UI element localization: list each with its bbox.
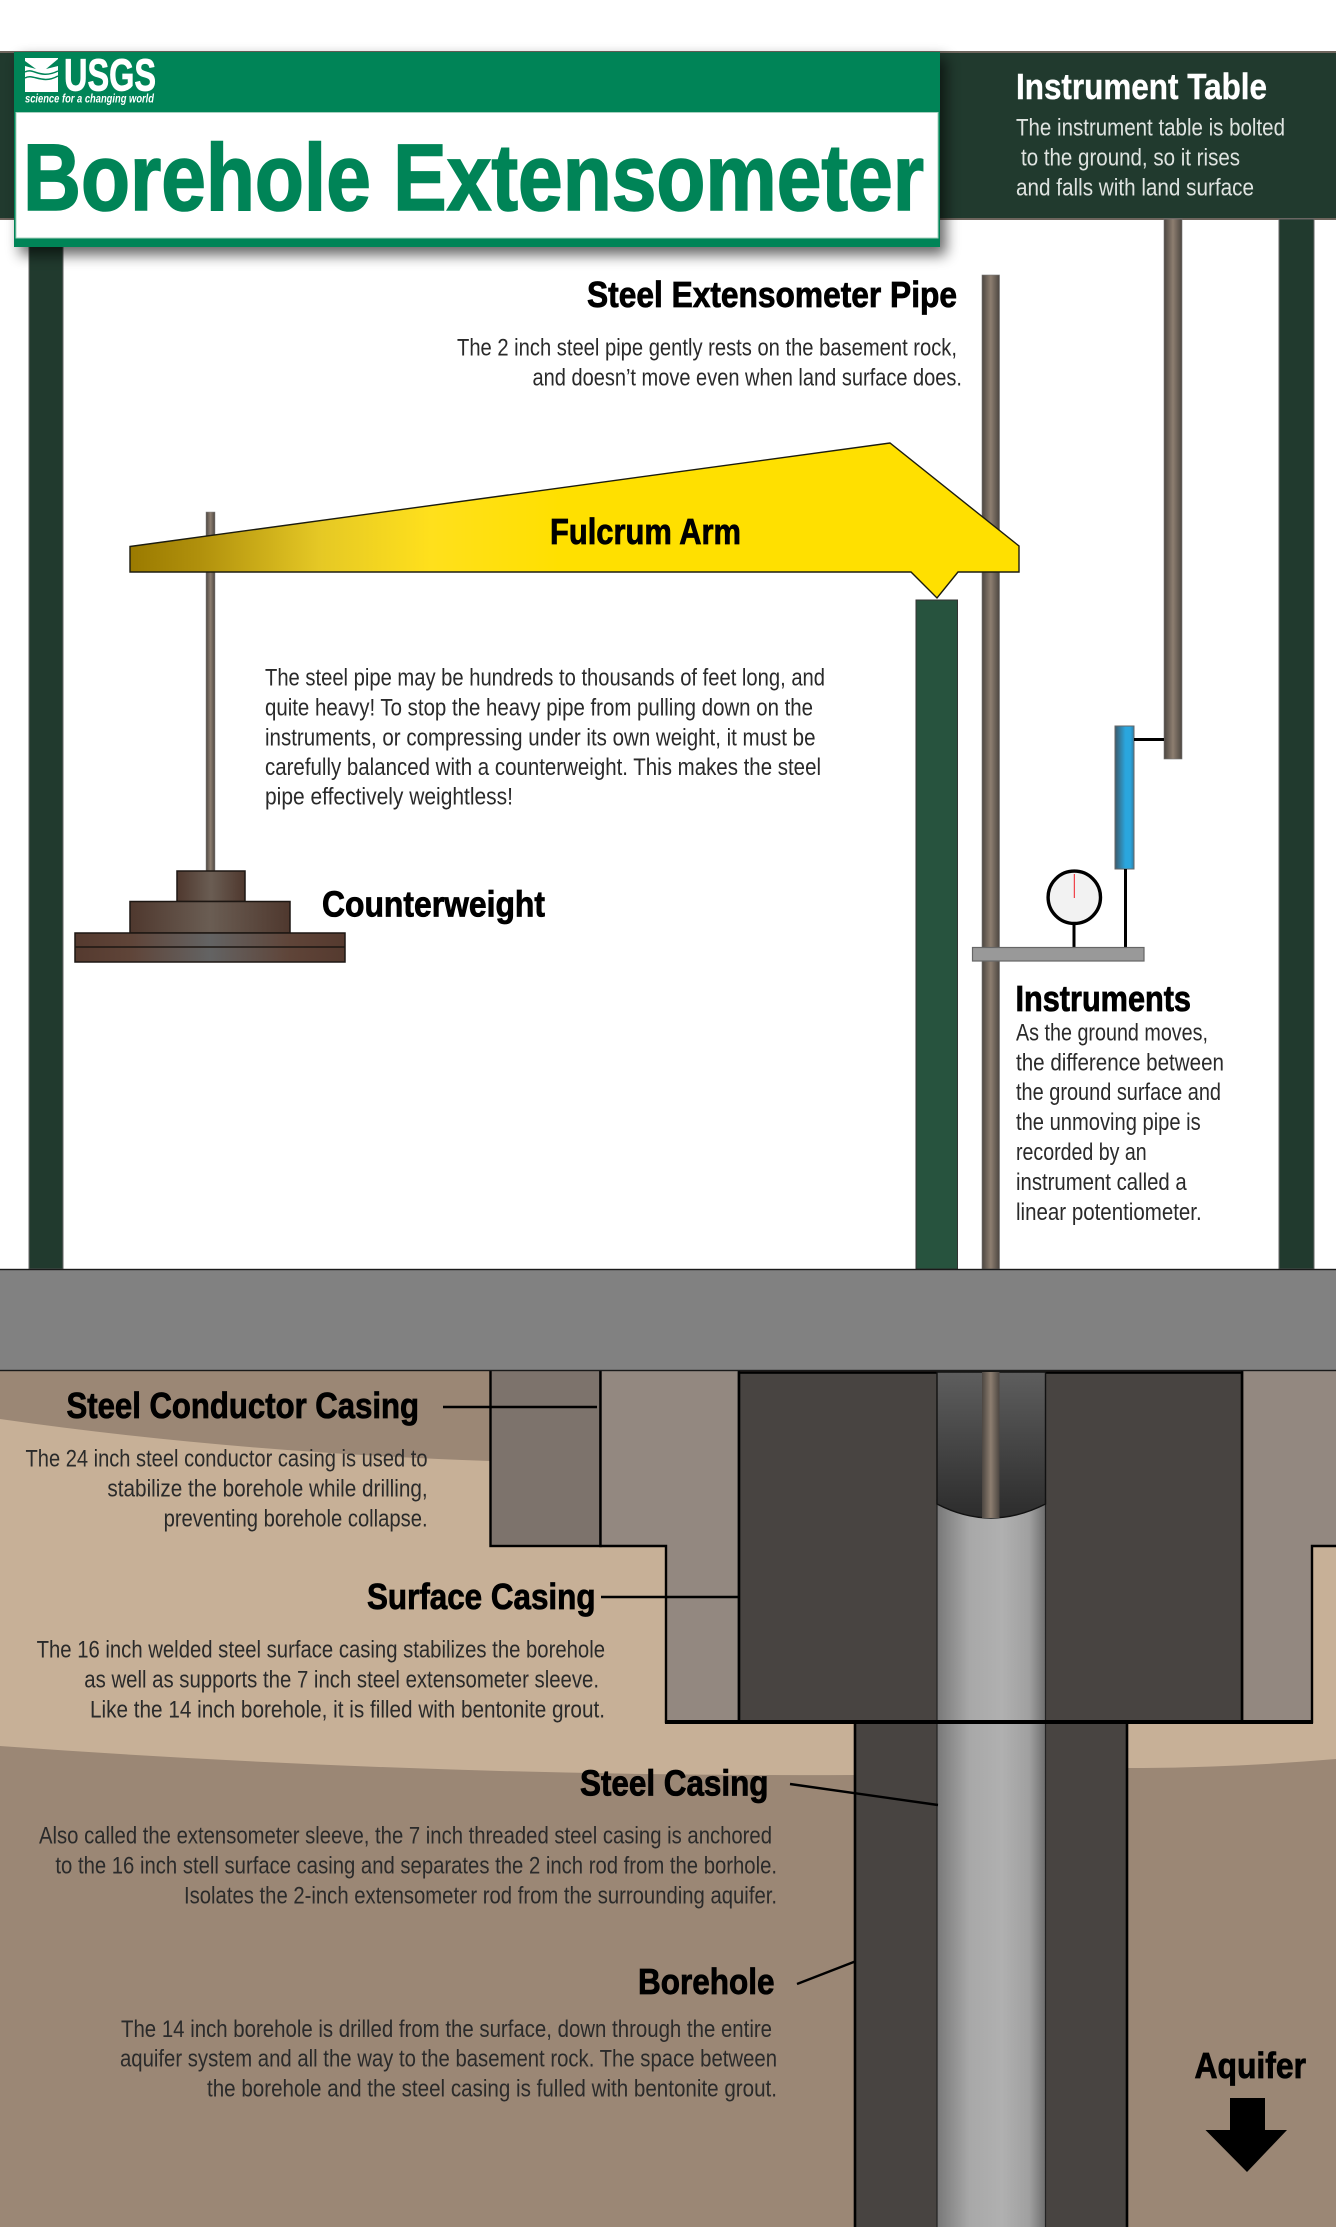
instruments description: the difference between	[1016, 1049, 1224, 1076]
instruments description: the ground surface and	[1016, 1079, 1221, 1106]
leader line: borehole	[797, 1962, 855, 1984]
steel extensometer pipe	[982, 275, 1000, 1269]
steel casing heading: Steel Casing	[580, 1762, 768, 1804]
instrument table description: to the ground, so it rises	[1021, 144, 1240, 172]
surface casing description: Like the 14 inch borehole, it is filled with bentonite grout.	[90, 1696, 605, 1723]
counterweight explanation	[265, 664, 825, 811]
surface casing description	[37, 1636, 605, 1723]
potentiometer bracket	[1134, 738, 1164, 741]
aquifer label: Aquifer	[1194, 2045, 1306, 2086]
steel casing description	[39, 1822, 777, 1909]
steel conductor casing description: The 24 inch steel conductor casing is used to	[26, 1446, 428, 1473]
USGS tagline: science for a changing world	[25, 92, 155, 106]
steel casing pipe	[937, 1500, 1046, 2227]
surface casing, right	[1242, 1369, 1336, 1722]
instruments description: recorded by an	[1016, 1139, 1147, 1166]
steel extensometer pipe heading: Steel Extensometer Pipe	[587, 274, 957, 315]
steel extensometer pipe description	[457, 334, 962, 391]
counterweight stack	[75, 871, 345, 962]
borehole with bentonite grout	[855, 1722, 1127, 2227]
concrete ground surface	[0, 1270, 1336, 1370]
counterweight explanation: pipe effectively weightless!	[265, 784, 513, 811]
borehole description: aquifer system and all the way to the basement rock. The space between	[120, 2046, 777, 2073]
steel casing description: Also called the extensometer sleeve, the 7 inch threaded steel casing is anchored	[39, 1822, 772, 1850]
counterweight label: Counterweight	[322, 884, 545, 924]
USGS logo	[25, 50, 156, 106]
borehole description: The 14 inch borehole is drilled from the surface, down through the entire	[121, 2016, 772, 2043]
counterweight rod	[206, 512, 215, 871]
leader line: steel conductor casing	[443, 1406, 597, 1408]
instruments description: the unmoving pipe is	[1016, 1109, 1201, 1136]
steel conductor casing description: stabilize the borehole while drilling,	[107, 1476, 428, 1503]
potentiometer rod	[1124, 869, 1127, 947]
borehole heading: Borehole	[638, 1961, 774, 2002]
instruments heading: Instruments	[1016, 978, 1191, 1019]
USGS wordmark: USGS	[64, 50, 156, 101]
steel conductor casing description	[26, 1446, 428, 1532]
instrument table hanger pipe	[1164, 219, 1182, 759]
borehole description	[120, 2016, 777, 2103]
instrument assembly	[972, 726, 1164, 961]
steel casing description: Isolates the 2-inch extensometer rod from the surrounding aquifer.	[184, 1882, 777, 1909]
surface casing description: The 16 inch welded steel surface casing stabilizes the borehole	[37, 1636, 605, 1663]
steel casing description: to the 16 inch stell surface casing and separates the 2 inch rod from the borhole.	[55, 1852, 777, 1879]
instruments description	[1016, 1019, 1224, 1226]
surface casing description: as well as supports the 7 inch steel extensometer sleeve.	[84, 1666, 599, 1693]
pipe interior view	[937, 1372, 1046, 1518]
grout-filled surface borehole	[739, 1372, 1242, 1722]
instruments description: linear potentiometer.	[1016, 1199, 1202, 1226]
steel conductor casing heading: Steel Conductor Casing	[66, 1385, 419, 1426]
steel conductor casing description: preventing borehole collapse.	[164, 1505, 428, 1532]
counterweight explanation: carefully balanced with a counterweight. This makes the steel	[265, 754, 821, 781]
borehole description: the borehole and the steel casing is fulled with bentonite grout.	[207, 2076, 777, 2103]
instrument table description	[1016, 114, 1285, 202]
instrument table band	[0, 52, 1336, 219]
counterweight explanation: The steel pipe may be hundreds to thousands of feet long, and	[265, 664, 825, 691]
counterweight explanation: instruments, or compressing under its own weight, it must be	[265, 724, 816, 751]
left table post	[29, 219, 63, 1269]
tan sediment layer	[0, 1419, 1336, 1775]
surface casing heading: Surface Casing	[367, 1576, 596, 1617]
instrument table description: and falls with land surface	[1016, 174, 1254, 202]
leader line: steel casing	[790, 1784, 938, 1805]
instrument platform	[972, 948, 1144, 961]
instruments description: As the ground moves,	[1016, 1019, 1208, 1046]
fulcrum arm	[130, 443, 1019, 598]
extensometer rod inside casing	[982, 1372, 1000, 1518]
title: Borehole Extensometer	[23, 125, 924, 231]
icon: USGS wave mark	[25, 58, 58, 92]
instruments description: instrument called a	[1016, 1169, 1187, 1196]
fulcrum arm label: Fulcrum Arm	[550, 511, 741, 552]
subsurface aquifer background	[0, 1371, 1336, 2227]
counterweight explanation: quite heavy! To stop the heavy pipe from pulling down on the	[265, 694, 813, 721]
instrument table description: The instrument table is bolted	[1016, 114, 1285, 142]
leader line: surface casing	[601, 1596, 739, 1598]
steel conductor casing, left	[490, 1369, 600, 1546]
arrow: down into aquifer	[1206, 2098, 1287, 2172]
gauge stem	[1072, 925, 1076, 947]
right table post	[1279, 219, 1314, 1269]
title panel shadow	[20, 58, 946, 255]
bottom edge of surface casing	[665, 1720, 1313, 1724]
instrument table heading: Instrument Table	[1016, 66, 1267, 107]
surface casing, left	[600, 1369, 739, 1722]
fulcrum support post	[916, 600, 958, 1269]
steel extensometer pipe description: The 2 inch steel pipe gently rests on the basement rock,	[457, 334, 957, 362]
title panel	[14, 50, 940, 247]
steel extensometer pipe description: and doesn’t move even when land surface does.	[532, 364, 962, 391]
icon: linear potentiometer	[1115, 726, 1134, 869]
icon: dial gauge	[1048, 871, 1101, 924]
